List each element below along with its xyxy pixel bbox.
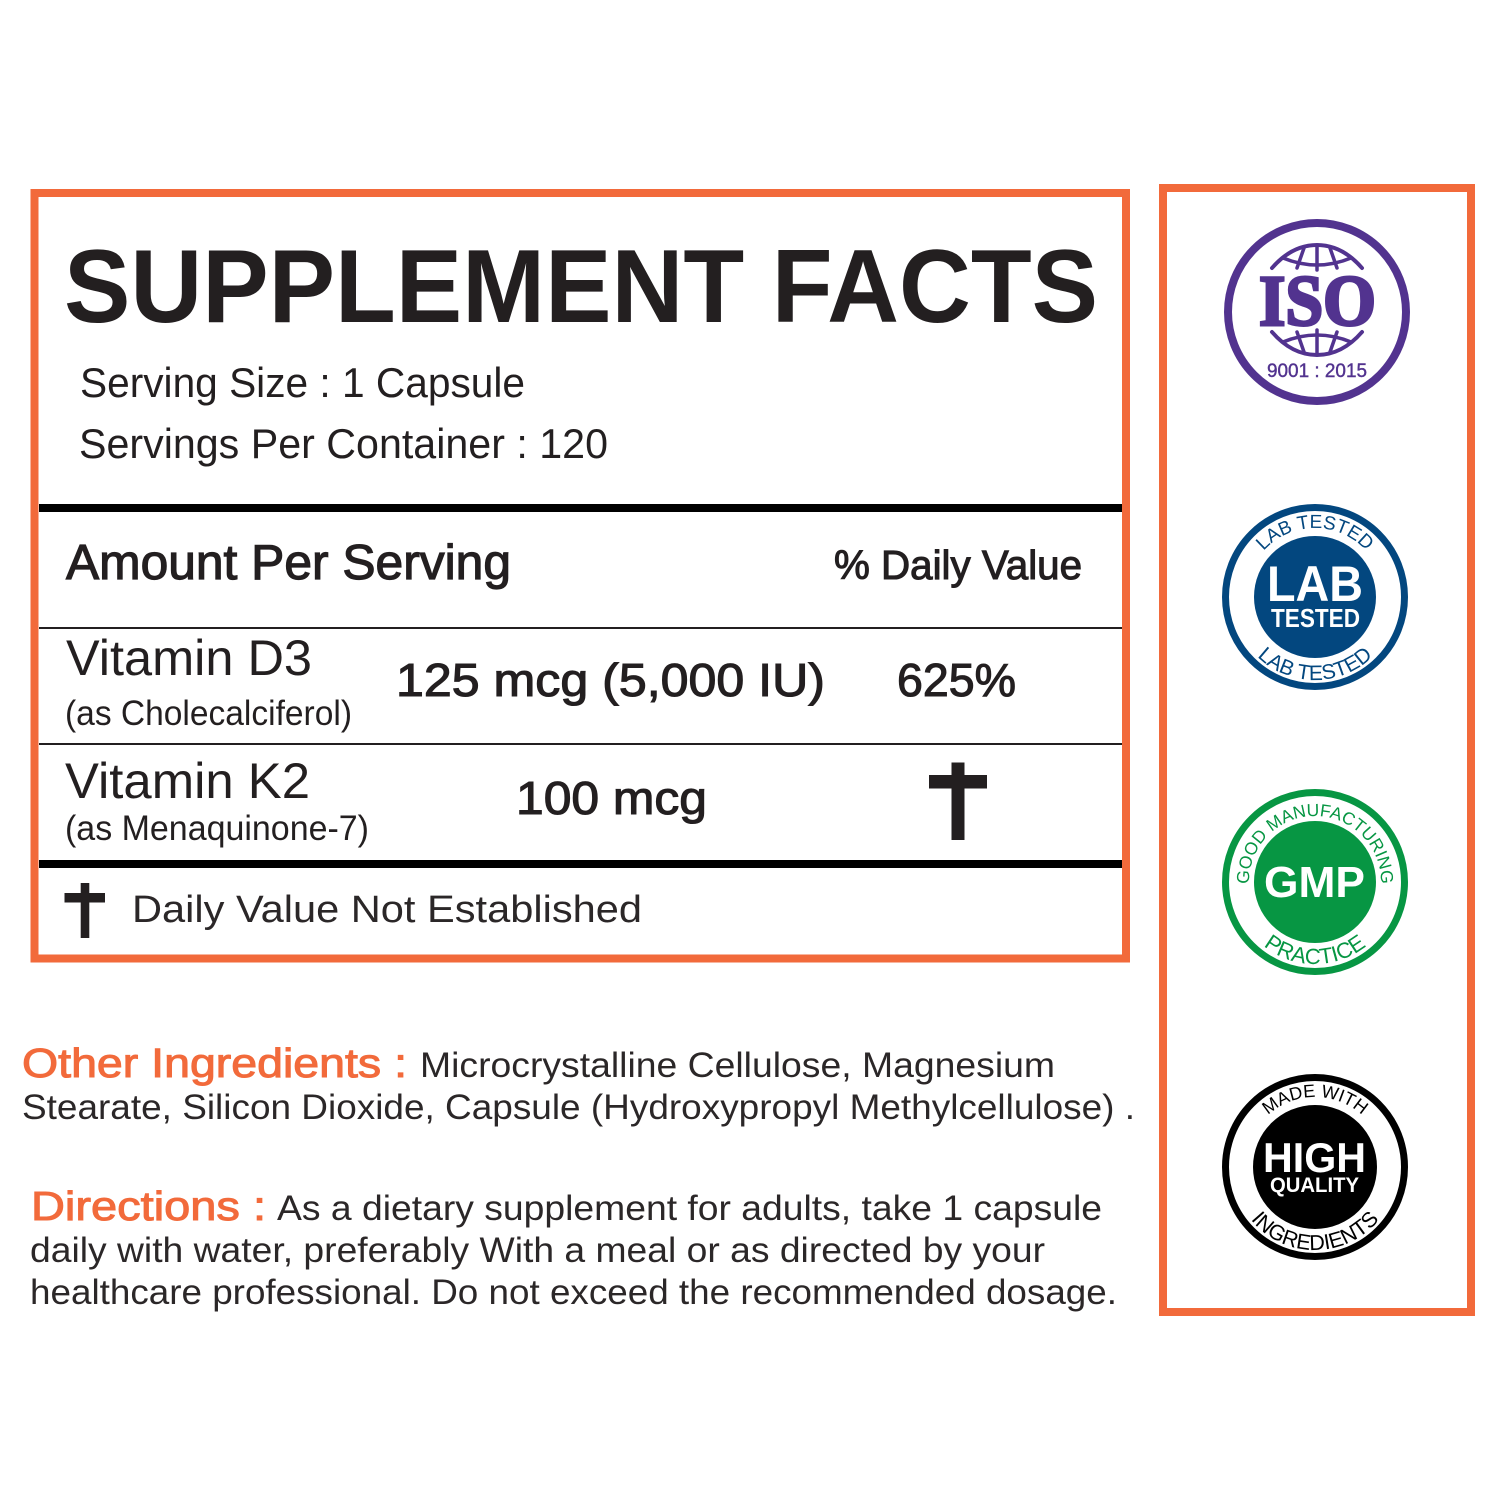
row: vitamin K2: Vitamin K2 — [65, 753, 310, 809]
footnote — [64, 883, 642, 938]
directions: Directions : — [31, 1183, 266, 1229]
directions: daily with water, preferably With a meal or as directed by your — [30, 1231, 1045, 1270]
table header: % Daily Value — [834, 542, 1082, 588]
row: vitamin D3: 125 mcg (5,000 IU) — [396, 654, 825, 706]
icon: globe arcs — [1272, 245, 1362, 355]
title: SUPPLEMENT FACTS — [64, 229, 1098, 345]
badge: GMP — [1222, 789, 1408, 975]
badge: lab tested: TESTED — [1271, 603, 1360, 633]
badge: high quality: INGREDIENTS — [1252, 1211, 1378, 1250]
badge: GMP: PRACTICE — [1264, 934, 1366, 964]
table header — [66, 536, 1082, 590]
other ingredients: Other Ingredients : — [22, 1040, 407, 1086]
row: vitamin K2: (as Menaquinone-7) — [65, 809, 369, 848]
badge: GMP: GMP — [1264, 858, 1365, 907]
table header rule — [39, 504, 1122, 512]
table header: Amount Per Serving — [66, 536, 511, 590]
other ingredients: Stearate, Silicon Dioxide, Capsule (Hydroxypropyl Methylcellulose) . — [22, 1088, 1135, 1127]
badge: lab tested — [1222, 504, 1408, 690]
directions: healthcare professional. Do not exceed the recommended dosage. — [30, 1273, 1117, 1312]
panel: certifications — [1163, 188, 1471, 1312]
row: vitamin D3: Vitamin D3 — [66, 630, 312, 686]
badge: high quality: QUALITY — [1270, 1174, 1359, 1197]
row: vitamin D3: (as Cholecalciferol) — [65, 694, 352, 733]
badge: high quality: HIGH — [1263, 1134, 1366, 1181]
row: vitamin D3: 625% — [897, 654, 1016, 706]
row: vitamin K2: 100 mcg — [516, 772, 707, 824]
badge: high quality — [1222, 1074, 1408, 1260]
other ingredients — [22, 1040, 1135, 1127]
other ingredients: Microcrystalline Cellulose, Magnesium — [420, 1046, 1055, 1085]
footnote: Daily Value Not Established — [132, 889, 642, 931]
icon: dagger large — [929, 762, 987, 840]
badge: ISO 9001:2015: ISO — [1259, 261, 1376, 341]
directions — [30, 1183, 1117, 1312]
badge: ISO 9001:2015 — [1228, 223, 1406, 401]
row: vitamin K2 — [65, 753, 987, 848]
badge: lab tested: LAB TESTED — [1258, 646, 1370, 680]
badge: lab tested: LAB TESTED — [1256, 514, 1372, 550]
badge: GMP: GOOD MANUFACTURING — [1236, 804, 1394, 883]
badge: high quality: MADE WITH — [1262, 1084, 1368, 1114]
row: vitamin D3 — [65, 630, 1016, 733]
panel: supplement facts — [34, 193, 1126, 958]
badge: lab tested: LAB — [1267, 556, 1363, 612]
serving info — [79, 359, 608, 467]
directions: As a dietary supplement for adults, take 1 capsule — [277, 1189, 1102, 1228]
badge: ISO 9001:2015: 9001 : 2015 — [1267, 361, 1367, 382]
serving info: Servings Per Container : 120 — [79, 420, 608, 467]
serving info: Serving Size : 1 Capsule — [80, 359, 525, 406]
